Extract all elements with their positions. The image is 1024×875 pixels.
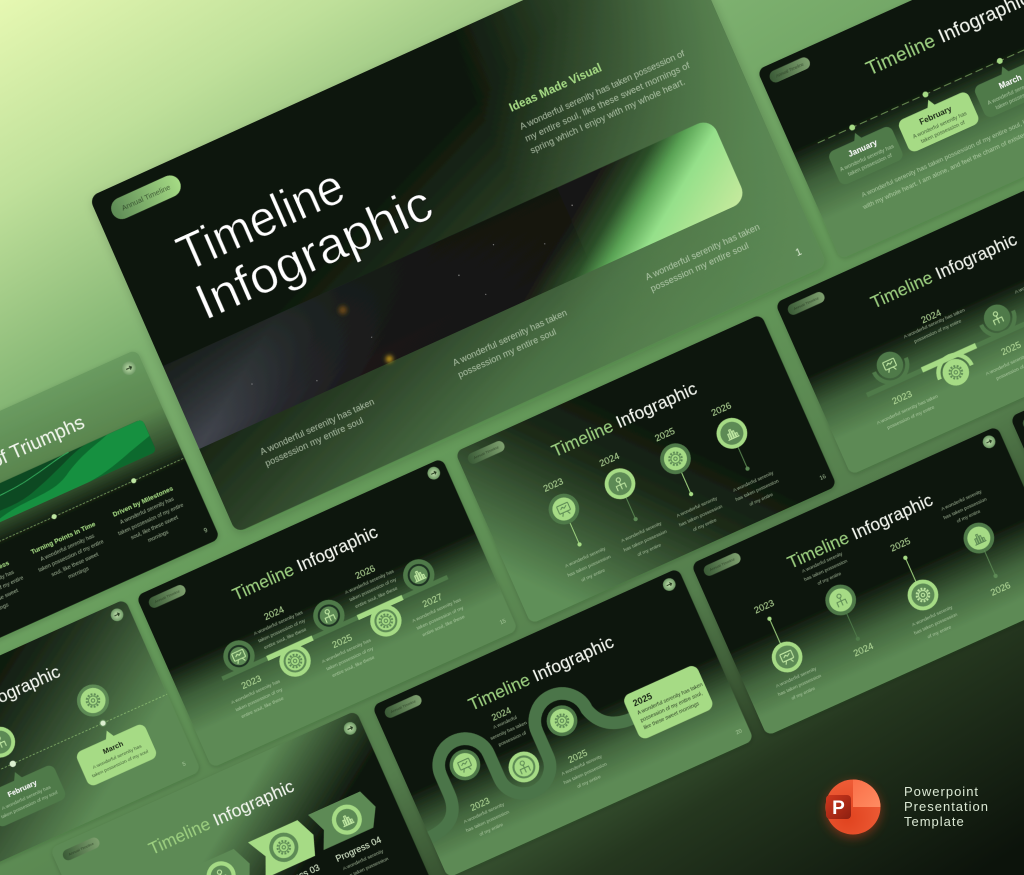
column: turning points: soul, like these sweet	[51, 552, 100, 578]
card: February: taken possession of my soul	[0, 790, 59, 821]
card: March: March	[998, 73, 1023, 91]
label pill	[61, 836, 101, 862]
node 2024: has taken possession	[803, 558, 849, 583]
card: 2025: 2025	[631, 691, 654, 709]
heading: Timeline Infographic	[146, 776, 297, 859]
label pill	[147, 583, 187, 610]
label pill	[1021, 404, 1024, 431]
pin 2025: 2025	[653, 425, 676, 444]
node 2023: of my entire	[790, 686, 816, 702]
node 2025: has taken possession	[913, 612, 959, 637]
label pill	[702, 551, 742, 578]
card: February: February	[918, 104, 954, 127]
chevron 02	[187, 845, 257, 875]
page number: 5	[182, 761, 187, 768]
labels 2026	[338, 556, 402, 611]
column: progress	[0, 557, 32, 627]
label pill: Annual Timeline	[709, 557, 736, 572]
pin 2025: has taken possession	[678, 504, 724, 529]
band	[221, 575, 449, 681]
card: January: A wonderful serenity has	[839, 143, 895, 173]
pin 2025: A wonderful serenity	[676, 495, 719, 519]
pin 2025	[641, 419, 728, 537]
pin 2025: of my entire	[692, 517, 718, 533]
node 2025: 2025	[888, 535, 912, 554]
card: March	[72, 716, 158, 788]
pin 2024	[586, 444, 672, 562]
labels: A wonderful serenity	[342, 848, 385, 872]
label pill	[466, 439, 506, 466]
node 2026	[939, 488, 1024, 603]
labels 2027	[406, 584, 470, 640]
column: turning points	[30, 521, 112, 591]
labels 2024: possession of	[498, 730, 528, 748]
labels 2026: entire soul, like these	[354, 585, 399, 610]
labels 2026: 2026	[353, 562, 377, 581]
labels 2023: 2023	[469, 796, 491, 813]
pin 2024: of my entire	[636, 542, 662, 558]
arrow button	[981, 433, 997, 450]
column: milestones	[109, 484, 192, 554]
labels 2023: has taken possession	[465, 809, 511, 834]
card: February: A wonderful serenity has	[1, 784, 52, 812]
paragraph: my entire soul, like these sweet mornings of	[523, 60, 692, 144]
card: February: taken possession of	[920, 120, 966, 145]
caption three: possession my entire soul	[649, 241, 750, 294]
node 2024: A wonderful serenity	[801, 551, 844, 575]
labels 2023: entire soul, like these	[240, 695, 285, 720]
chevron 03	[248, 817, 321, 875]
node 2024: 2024	[851, 640, 875, 658]
page number: 16	[819, 474, 827, 482]
node 2026	[365, 600, 407, 642]
slide: progress chevrons	[50, 710, 432, 875]
label pill: Annual Timeline	[775, 61, 805, 78]
labels 2023: A wonderful serenity	[463, 801, 506, 825]
heading: Timeline Infographic	[229, 521, 381, 604]
pin 2026: A wonderful serenity	[732, 470, 775, 494]
winding road	[398, 669, 644, 838]
card: March: taken possession of my soul	[91, 749, 150, 780]
labels 2025: of my entire	[576, 774, 602, 790]
arrow button	[342, 720, 358, 737]
node 2025	[308, 595, 350, 636]
template caption: Presentation	[904, 799, 989, 814]
node 2023	[445, 745, 485, 785]
caption two: possession my entire soul	[456, 326, 558, 380]
labels	[273, 835, 391, 875]
heading: Timeline Infographic	[465, 631, 617, 714]
labels 2024: entire soul, like these	[263, 626, 308, 651]
icon: org circle	[0, 722, 20, 763]
picture: green fabric	[0, 419, 157, 554]
card: February	[0, 757, 67, 828]
labels 2023	[457, 790, 514, 842]
labels 2024: serenity has taken	[490, 720, 528, 742]
pin 2023	[529, 470, 616, 588]
PowerPoint logo	[825, 779, 881, 838]
card: March	[970, 51, 1024, 119]
slide: right seesaw timeline	[775, 165, 1024, 475]
slide: zigzag timeline	[691, 426, 1024, 736]
labels 2025: A wonderful serenity	[560, 753, 603, 777]
year labels and captions: A wonderful serenity has taken	[903, 307, 966, 340]
labels 2025: 2025	[567, 748, 589, 765]
main title	[166, 127, 440, 330]
labels 2023: A wonderful serenity has	[230, 679, 282, 706]
dashed timeline	[0, 691, 168, 835]
labels 2023: of my entire	[478, 822, 504, 838]
icon: org node	[976, 299, 1020, 341]
pin 2026: has taken possession	[735, 478, 780, 503]
node 2026: 2026	[989, 579, 1012, 598]
node 2023: 2023	[752, 597, 776, 616]
card: 2025: like these sweet mornings	[643, 701, 701, 732]
column: milestones: soul, like these sweet	[130, 515, 180, 541]
pin 2024: 2024	[597, 450, 621, 469]
column: turning points: taken possession of my entire	[38, 539, 105, 574]
heading: Timeline Infographic	[548, 378, 700, 461]
subheading: Ideas Made Visual	[508, 62, 604, 115]
column: turning points: A wonderful serenity has	[40, 533, 96, 563]
labels 2027: taken possession of my	[416, 605, 465, 632]
PowerPoint logo: P	[832, 798, 845, 819]
labels 2025: taken possession of my	[326, 646, 375, 672]
arrow button	[661, 576, 678, 593]
slide: March card	[0, 599, 201, 875]
labels 2024: A wonderful	[492, 715, 518, 731]
chevron 04	[308, 788, 383, 850]
paragraph: A wonderful serenity has taken possession of	[518, 48, 686, 132]
card: January: January	[847, 138, 879, 159]
node 2026: of my entire	[956, 509, 982, 525]
labels 2025: has taken possession	[563, 761, 608, 786]
labels 2024	[481, 701, 532, 750]
column: milestones: A wonderful serenity has	[119, 496, 175, 526]
labels 2026: taken possession of my	[349, 577, 398, 603]
pin 2023: 2023	[541, 475, 565, 494]
label pill: Annual Timeline	[154, 589, 181, 604]
page number: 15	[499, 619, 507, 627]
node 2023	[218, 635, 260, 677]
year labels and captions: possession of my entire	[913, 318, 963, 345]
year labels and captions: possession of my entire	[886, 404, 936, 431]
labels 2023	[225, 666, 289, 721]
caption one: A wonderful serenity has taken	[258, 396, 376, 457]
node 2024	[800, 550, 885, 665]
pin 2026: of my entire	[748, 491, 774, 508]
labels 2024: taken possession of my	[257, 618, 307, 644]
label pill: Annual Timeline	[120, 182, 172, 213]
labels 2023: taken possession of my	[235, 687, 284, 713]
picture band	[163, 118, 747, 449]
pin 2024: has taken possession	[623, 529, 668, 554]
column: milestones: taken possession of my entire	[117, 502, 185, 537]
arrow button	[426, 465, 442, 481]
caption one: possession my entire soul	[264, 415, 365, 469]
page number: 9	[203, 527, 209, 535]
heading: Timeline Infographic	[784, 489, 936, 572]
label pill	[786, 290, 826, 317]
slide: triumphs	[0, 349, 220, 690]
labels 2025: A wonderful serenity has	[321, 638, 373, 665]
year labels and captions: 2024	[919, 307, 943, 325]
label pill: Annual Timeline	[390, 699, 417, 714]
labels 2027: 2027	[420, 591, 444, 610]
arrow button	[109, 606, 125, 623]
year labels and captions: 2025	[999, 339, 1023, 358]
slide: five year band timeline	[136, 458, 518, 768]
page number: 1	[794, 246, 804, 259]
node 2024	[274, 640, 316, 682]
pin 2023: has taken possession	[567, 554, 612, 579]
dashed timeline with dots	[0, 456, 186, 612]
node 2024	[504, 747, 544, 787]
year labels and captions: 2023	[890, 388, 914, 406]
main title: Timeline	[169, 158, 352, 282]
slide: top-right January February March	[757, 0, 1024, 259]
pin 2024: A wonderful serenity	[620, 520, 663, 544]
labels: Progress 04	[334, 835, 383, 864]
column: milestones: Driven by Milestones	[112, 485, 175, 518]
slide: far-right partial	[1010, 279, 1024, 589]
column: milestones: mornings	[147, 529, 170, 544]
column: turning points: Turning Points in Time	[30, 521, 97, 556]
slide: four pins timeline	[455, 314, 837, 624]
seesaw band	[866, 274, 1024, 397]
node 2025	[542, 700, 582, 741]
labels 2025: 2025	[330, 632, 354, 650]
labels 2025: entire soul, like these	[331, 655, 376, 679]
paragraph: spring which I enjoy with my whole heart.	[529, 76, 687, 155]
column: turning points: mornings	[67, 566, 90, 581]
labels 2027: A wonderful serenity has	[411, 597, 463, 625]
card: January: taken possession of	[847, 153, 893, 178]
card: January	[824, 118, 905, 186]
arrow button	[120, 359, 138, 377]
labels 2025	[316, 625, 379, 680]
labels 2026: A wonderful serenity has	[344, 568, 396, 596]
node 2025	[877, 530, 962, 645]
labels 2023: 2023	[239, 673, 263, 691]
slide: winding snake timeline	[372, 568, 754, 875]
pin 2026: 2026	[709, 399, 733, 418]
labels 2024: A wonderful serenity has	[253, 610, 304, 637]
node 2023	[741, 591, 826, 706]
card: 2025: possession of my entire soul,	[640, 691, 704, 724]
page number: 20	[735, 729, 743, 737]
template caption: Powerpoint	[904, 784, 979, 799]
card: February: February	[6, 778, 39, 799]
node 2025: A wonderful serenity	[911, 604, 954, 628]
pin 2026	[697, 394, 784, 512]
dashed timeline with dots	[817, 0, 1024, 146]
caption three: A wonderful serenity has taken	[644, 221, 761, 282]
pin 2023: of my entire	[580, 567, 606, 583]
pin 2023: A wonderful serenity	[564, 546, 607, 569]
icon: gear circle	[72, 679, 114, 722]
node 2027	[398, 554, 439, 596]
node 2026: A wonderful serenity	[940, 489, 983, 513]
label pill	[768, 55, 812, 84]
labels 2027: entire soul, like these	[422, 614, 466, 638]
label pill: Annual Timeline	[793, 296, 820, 311]
year labels and captions: A wonderful serenity has taken	[876, 394, 939, 427]
label pill: Annual Timeline	[473, 445, 500, 460]
icon: gear node	[933, 349, 977, 392]
label pill: Annual Timeline	[68, 842, 95, 857]
labels 2024	[247, 597, 311, 652]
icon: presentation node	[869, 346, 913, 388]
card: February	[894, 84, 981, 154]
main title: Infographic	[187, 174, 440, 330]
card: 2025: A wonderful serenity has taken	[637, 682, 704, 717]
card: March: March	[101, 739, 125, 756]
labels 2024: 2024	[490, 705, 512, 723]
card: February: A wonderful serenity has	[912, 111, 968, 140]
node 2024: of my entire	[817, 571, 843, 587]
year labels and captions	[844, 248, 1024, 434]
node 2023: A wonderful serenity	[775, 666, 818, 690]
label pill	[108, 172, 184, 223]
labels 2025	[554, 742, 612, 794]
main slide: title	[89, 0, 827, 533]
caption two: A wonderful serenity has taken	[451, 307, 568, 368]
template caption	[904, 784, 989, 829]
card: March: A wonderful serenity has	[92, 743, 143, 771]
template caption: Template	[904, 814, 965, 829]
node 2026: has taken possession	[943, 496, 988, 521]
node 2025: of my entire	[927, 624, 953, 640]
heading: Timeline Infographic	[867, 229, 1020, 312]
labels 2024: 2024	[262, 604, 286, 622]
label pill	[383, 693, 423, 720]
node 2023: has taken possession	[777, 673, 823, 698]
card: 2025	[622, 664, 715, 741]
